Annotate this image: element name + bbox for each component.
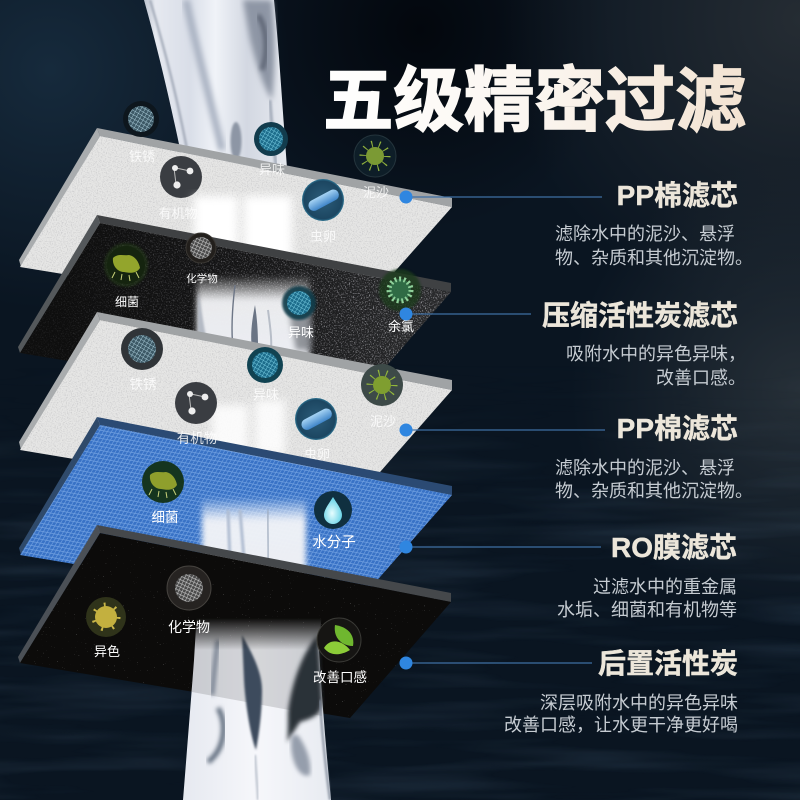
icon: organics 有机物 layer 3 [175,382,217,446]
icon: sediment 泥沙 layer 3: 泥沙 [370,414,396,429]
icon: rust 铁锈 layer 3 [121,328,163,392]
callout 5: post carbon filter [400,648,738,735]
callout 1: PP cotton filter: PP棉滤芯 [617,180,738,211]
layer 2 face [20,223,451,408]
layer 2 water [197,275,312,360]
callout 2: compressed carbon filter: 改善口感。 [656,368,746,388]
icon: odor 异味 layer 3 [247,347,283,402]
layer 1 face [20,136,452,321]
icon: rust 铁锈 [123,101,159,164]
icon: odor 异味 [254,122,288,177]
icon: bacteria 细菌 layer 4: 细菌 [152,510,178,525]
icon: bacteria 细菌: 细菌 [115,295,139,309]
callout 1: PP cotton filter: 滤除水中的泥沙、悬浮 [555,224,735,244]
icon: sediment 泥沙: 泥沙 [363,185,389,200]
callout 4: RO membrane filter [400,532,737,620]
layer 2 left rim [18,215,100,353]
filter layer 4: RO membrane [19,417,452,586]
callout 1: PP cotton filter: 物、杂质和其他沉淀物。 [555,248,753,268]
layer 3 face [20,320,452,505]
callout 5: post carbon filter: 深层吸附水中的异色异味 [540,693,738,713]
water stream: bottom [183,610,331,800]
icon: discoloration 异色: 异色 [94,644,120,659]
icon: eggs 虫卵 [302,179,344,244]
layer 4 water [202,497,306,577]
water stream: top [144,0,287,168]
icon: organics 有机物: 有机物 [158,206,198,221]
icon: eggs 虫卵: 虫卵 [310,229,336,244]
layer 5 face [20,533,451,718]
icon: residual chlorine 余氯 [379,269,421,334]
layer 4 left rim [19,417,100,555]
layer 3 water glow [212,400,285,455]
callout 3: PP cotton filter: PP棉滤芯 [617,413,738,444]
icon: rust 铁锈 layer 3: 铁锈 [130,377,157,392]
layer 2 speckle [20,223,451,408]
filter layer 5: post activated carbon [18,525,451,718]
layer 4 face [20,425,452,610]
icon: odor 异味 layer 2 [282,286,316,340]
callout 2: compressed carbon filter [400,300,746,388]
icon: eggs 虫卵 layer 3 [295,398,337,462]
filter layer 3: PP cotton [19,312,452,480]
icon: eggs 虫卵 layer 3: 虫卵 [304,447,330,462]
layer 4 top rim [97,417,452,495]
icon: residual chlorine 余氯: 余氯 [388,319,414,334]
icon: organics 有机物 layer 3: 有机物 [177,431,217,446]
filter layer 2: compressed activated carbon [18,215,451,372]
layer 3 top rim [97,312,452,390]
callout 5: post carbon filter: 改善口感，让水更干净更好喝 [504,715,738,735]
icon: water molecule 水分子 [312,491,356,551]
icon: odor 异味: 异味 [259,162,285,177]
icon: leaves 改善口感 [313,618,367,685]
icon: odor 异味 layer 3: 异味 [253,387,279,402]
icon: chemicals 化学物: 化学物 [186,272,218,285]
layer 1 top rim [97,128,452,207]
filter layer 1: PP cotton [19,128,452,321]
title: 五级精密过滤 [323,44,746,146]
layer 1 water glow [194,196,292,262]
icon: leaves 改善口感: 改善口感 [313,669,367,685]
callout 3: PP cotton filter: 物、杂质和其他沉淀物。 [555,481,753,501]
callout 3: PP cotton filter [400,413,753,501]
icon: water molecule 水分子: 水分子 [312,534,356,551]
callout 3: PP cotton filter: 滤除水中的泥沙、悬浮 [555,458,735,478]
callout 2: compressed carbon filter: 吸附水中的异色异味， [566,344,746,364]
icon: bacteria 细菌 [104,243,148,309]
icon: chemicals 化学物 layer 5: 化学物 [168,619,210,635]
callout 1: PP cotton filter [400,180,753,268]
callout 4: RO membrane filter: 过滤水中的重金属 [593,577,737,597]
layer 5 left rim [18,525,100,663]
icon: sediment 泥沙 [354,135,396,200]
callout 2: compressed carbon filter: 压缩活性炭滤芯 [542,300,738,331]
callout 4: RO membrane filter: RO膜滤芯 [611,532,737,563]
layer 3 left rim [19,312,100,450]
icon: chemicals 化学物 layer 5 [167,566,211,635]
icon: bacteria 细菌 layer 4 [142,461,184,525]
icon: sediment 泥沙 layer 3 [361,364,403,429]
layer 5 top rim [97,525,451,602]
icon: chemicals 化学物 [186,233,218,285]
icon: rust 铁锈: 铁锈 [129,149,155,164]
icon: discoloration 异色 [86,597,126,659]
callout 5: post carbon filter: 后置活性炭 [598,648,738,679]
icon: odor 异味 layer 2: 异味 [288,325,314,340]
layer 1 left rim [19,128,100,267]
layer 2 top rim [97,215,451,292]
callout 4: RO membrane filter: 水垢、细菌和有机物等 [557,600,737,620]
icon: organics 有机物 [158,156,202,221]
